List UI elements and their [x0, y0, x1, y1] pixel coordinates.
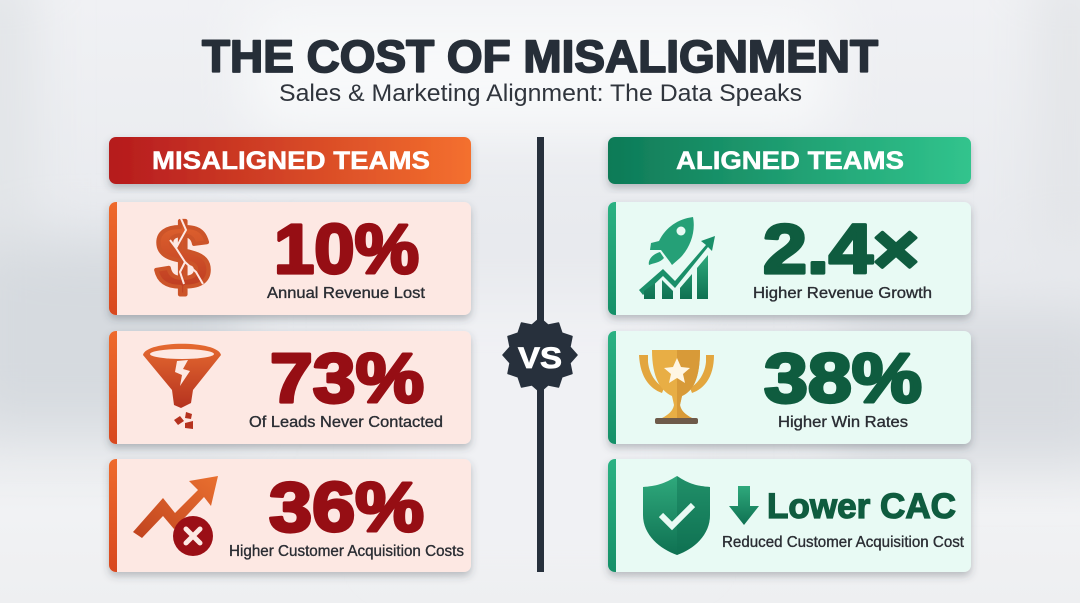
stat: 38%	[764, 339, 922, 417]
label: Higher Revenue Growth	[753, 285, 932, 302]
panel: 73% leads never contacted	[109, 331, 471, 444]
icon: down arrow	[729, 486, 759, 525]
title: THE COST OF MISALIGNMENT	[202, 31, 878, 82]
panel: 36% higher CAC	[109, 459, 471, 572]
label: Higher Win Rates	[778, 414, 908, 431]
VS badge: VS	[518, 342, 562, 375]
label: Reduced Customer Acquisition Cost	[722, 534, 965, 551]
icon: broken funnel	[143, 344, 221, 429]
center divider line	[537, 137, 544, 572]
stat: 2.4×	[763, 210, 919, 288]
stat: 36%	[269, 468, 424, 546]
icon: cracked dollar: $	[155, 208, 210, 308]
panel: lower CAC	[608, 459, 971, 572]
header: misaligned teams: MISALIGNED TEAMS	[152, 147, 430, 175]
icon: rising arrow with x	[133, 476, 218, 556]
stat: Lower CAC	[767, 487, 956, 526]
stat: 73%	[270, 339, 424, 417]
panel: 2.4x revenue growth	[608, 202, 971, 315]
header: aligned teams	[608, 137, 971, 184]
header: aligned teams: ALIGNED TEAMS	[676, 147, 904, 175]
panel: 38% win rates	[608, 331, 971, 444]
label: Of Leads Never Contacted	[249, 414, 443, 431]
label: Annual Revenue Lost	[267, 285, 426, 302]
stat: 10%	[274, 210, 419, 288]
header: misaligned teams	[109, 137, 471, 184]
label: Higher Customer Acquisition Costs	[229, 543, 464, 560]
icon: shield with check	[643, 476, 710, 555]
subtitle: Sales & Marketing Alignment: The Data Speaks	[279, 80, 802, 107]
icon: trophy	[639, 350, 714, 424]
icon: rocket and growth bars	[639, 217, 715, 299]
VS badge	[503, 318, 577, 392]
panel: 10% annual revenue lost	[109, 202, 471, 315]
